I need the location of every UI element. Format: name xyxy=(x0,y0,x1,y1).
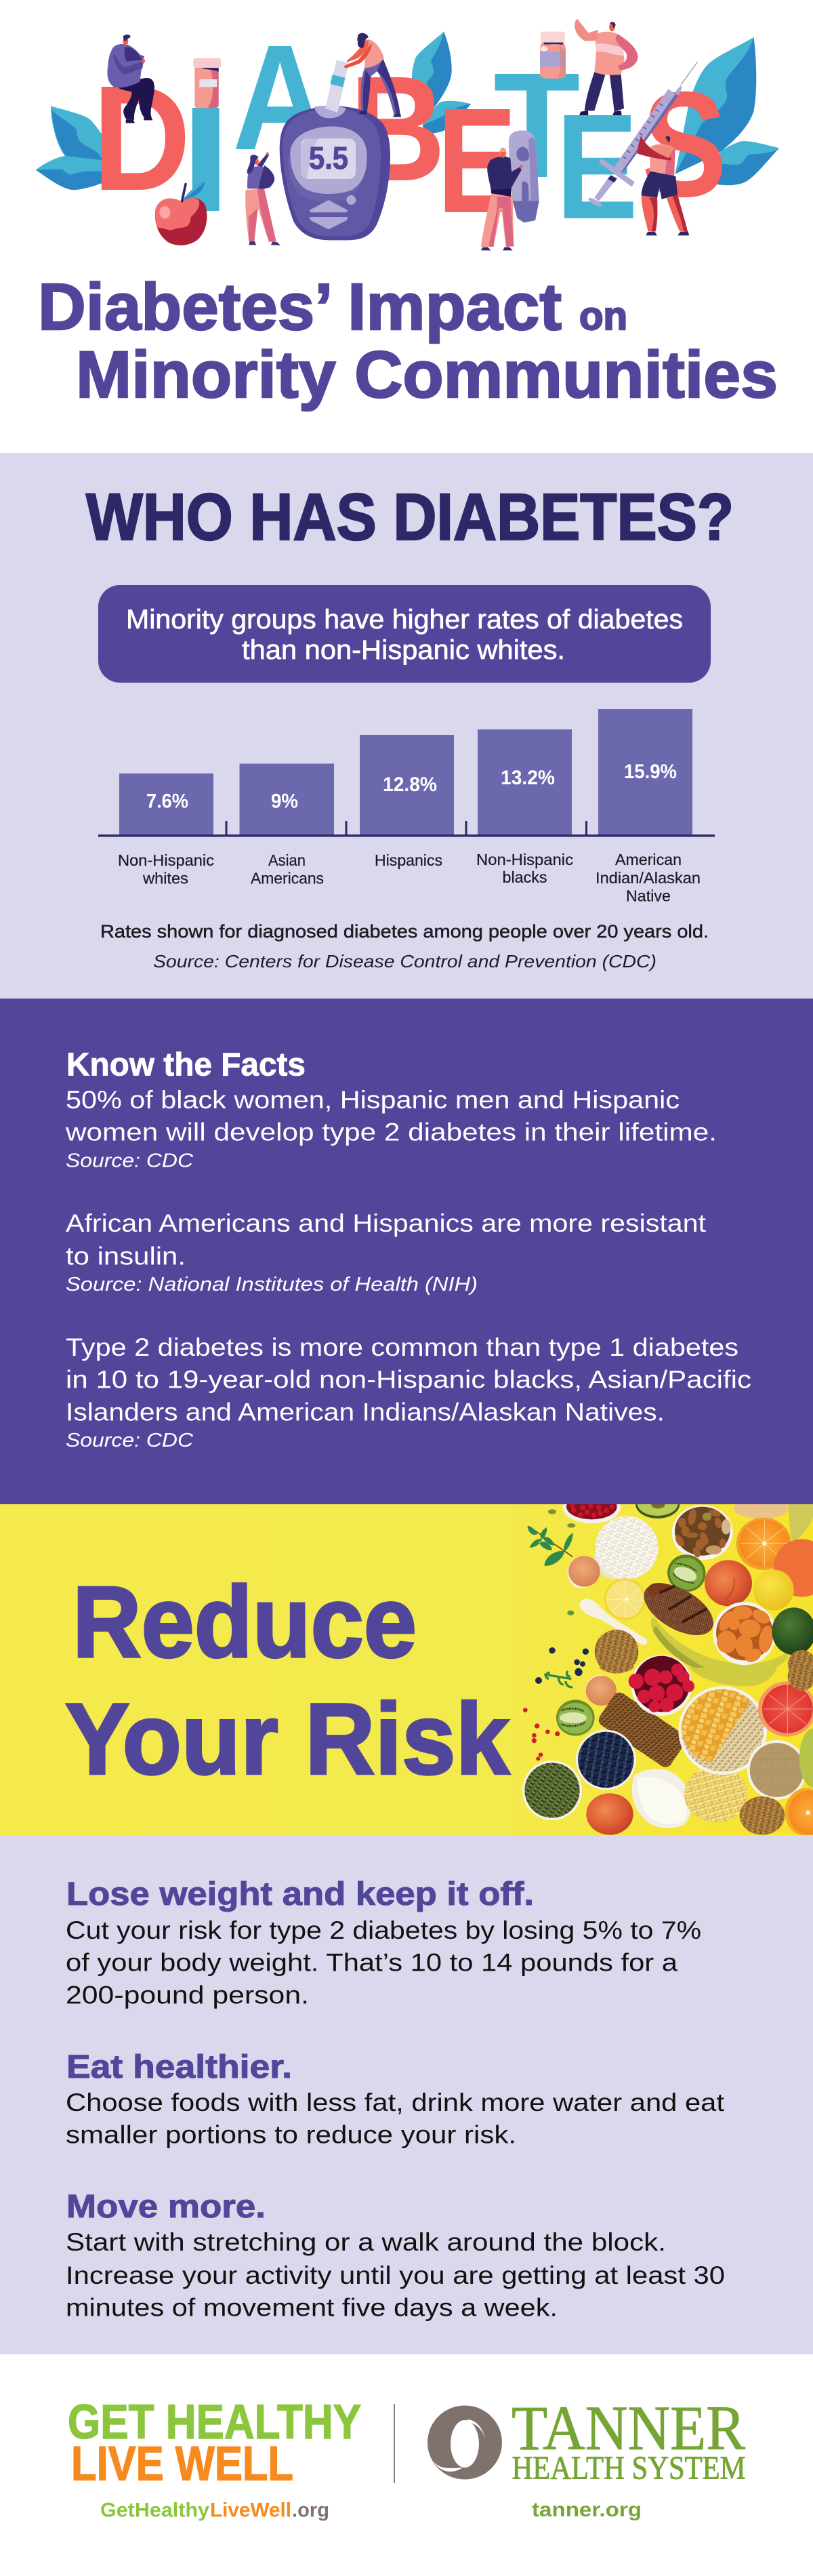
title: on xyxy=(579,294,627,338)
fact two: African Americans and Hispanics are more resistant xyxy=(66,1209,707,1237)
panel: who has diabetes xyxy=(0,453,813,999)
heading: know the facts: Know the Facts xyxy=(66,1047,306,1083)
tip: eat healthier: Choose foods with less fat, drink more water and eat xyxy=(66,2089,725,2116)
fact three: Islanders and American Indians/Alaskan Natives. xyxy=(66,1398,665,1426)
bar chart: diabetes rates: 13.2% xyxy=(501,767,555,789)
pen device with person xyxy=(481,130,539,250)
person waving on letter E xyxy=(575,19,638,115)
tip: move more xyxy=(66,2189,725,2321)
panel: risk reduction tips xyxy=(0,1835,813,2354)
letters DIABETES: B xyxy=(350,45,446,213)
fact two xyxy=(66,1209,707,1295)
bar chart: diabetes rates: 12.8% xyxy=(383,773,437,796)
bar chart: diabetes rates: 15.9% xyxy=(624,761,677,783)
url: tanner.org: tanner.org xyxy=(532,2499,642,2521)
meter reading: 5.5 xyxy=(309,140,348,176)
tip: move more: Start with stretching or a walk around the block. xyxy=(66,2228,666,2256)
bar chart: diabetes rates: whites xyxy=(142,869,188,887)
fact three: Type 2 diabetes is more common than type 1 diabetes xyxy=(66,1333,738,1361)
url: gethealthylivewell.org: .org xyxy=(292,2499,329,2522)
url: gethealthylivewell.org xyxy=(100,2499,329,2522)
heading: reduce your risk xyxy=(65,1565,510,1795)
logo: get healthy live well xyxy=(68,2396,361,2491)
person placing test strip xyxy=(343,33,401,117)
letters DIABETES: D xyxy=(92,54,191,222)
fact two: Source: National Institutes of Health (NIH) xyxy=(66,1274,478,1295)
tip: move more: Increase your activity until you are getting at least 30 xyxy=(66,2261,725,2289)
fact one xyxy=(65,1086,717,1171)
bar chart: diabetes rates xyxy=(98,709,715,904)
chart note: Rates shown for diagnosed diabetes among people over 20 years old. xyxy=(100,921,709,942)
logo: tanner health system: HEALTH SYSTEM xyxy=(512,2449,745,2487)
letters DIABETES xyxy=(92,14,727,250)
woman looking up xyxy=(245,153,280,245)
logo: tanner ring icon xyxy=(428,2405,502,2480)
bar chart: diabetes rates: Hispanics xyxy=(375,851,442,869)
lower food items xyxy=(522,1655,813,1836)
letters DIABETES: E xyxy=(437,77,517,244)
url: gethealthylivewell.org: LiveWell xyxy=(210,2499,291,2522)
bar chart: diabetes rates: Non-Hispanic xyxy=(476,851,573,868)
vial on letter T xyxy=(540,32,566,79)
pill bottle on letter I xyxy=(193,58,221,108)
bar chart: diabetes rates: American xyxy=(615,851,682,868)
bar chart: diabetes rates: Asian xyxy=(268,851,306,869)
fact three: in 10 to 19-year-old non-Hispanic blacks, Asian/Pacific xyxy=(66,1365,751,1394)
callout: minority groups xyxy=(98,585,711,683)
chart source: Source: Centers for Disease Control and Prevention (CDC) xyxy=(153,951,656,971)
logo: get healthy live well: LIVE WELL xyxy=(71,2438,293,2491)
tip: eat healthier: smaller portions to reduce your risk. xyxy=(66,2120,516,2149)
bar chart: diabetes rates: Indian/Alaskan xyxy=(596,869,701,887)
letters DIABETES: A xyxy=(232,14,327,182)
title: Minority Communities xyxy=(76,338,778,411)
hero illustration: diabetes lettering with people xyxy=(36,14,779,250)
apple xyxy=(155,181,207,245)
tip: lose weight: Cut your risk for type 2 diabetes by losing 5% to 7% xyxy=(66,1916,701,1944)
leaves behind letters xyxy=(36,32,779,190)
heading: who has diabetes: WHO HAS DIABETES? xyxy=(86,480,734,554)
syringe with person xyxy=(587,62,697,235)
logo: get healthy live well: GET HEALTHY xyxy=(68,2396,361,2449)
bar chart: diabetes rates: 7.6% xyxy=(146,790,188,812)
letters DIABETES: T xyxy=(493,41,580,209)
fact two: to insulin. xyxy=(66,1242,186,1270)
fact one: 50% of black women, Hispanic men and Hispanic xyxy=(66,1086,680,1114)
letters DIABETES: E xyxy=(556,83,638,250)
callout: minority groups: Minority groups have higher rates of diabetes xyxy=(126,605,683,635)
callout: minority groups: than non-Hispanic whites. xyxy=(242,635,565,665)
tip: move more: minutes of movement five days a week. xyxy=(66,2294,558,2321)
upper food items xyxy=(527,1504,813,1674)
tip: eat healthier xyxy=(66,2049,725,2149)
letters DIABETES: S xyxy=(642,60,727,228)
bar chart: diabetes rates: blacks xyxy=(503,868,547,886)
panel: reduce your risk banner xyxy=(0,1489,813,1836)
person sitting on letter D xyxy=(107,35,154,123)
letters DIABETES: I xyxy=(180,76,232,243)
fact three xyxy=(66,1333,751,1451)
tip: lose weight: 200-pound person. xyxy=(66,1981,309,2009)
heading: reduce your risk: Reduce xyxy=(72,1565,417,1678)
fact one: women will develop type 2 diabetes in their lifetime. xyxy=(65,1119,717,1146)
bar chart: diabetes rates: Non-Hispanic xyxy=(118,851,214,869)
url: gethealthylivewell.org: GetHealthy xyxy=(100,2499,209,2522)
bar chart: diabetes rates: Americans xyxy=(251,869,324,887)
panel: know the facts xyxy=(0,999,813,1504)
glucose meter xyxy=(280,60,390,240)
footer logos xyxy=(68,2394,745,2522)
tip: lose weight: Lose weight and keep it off. xyxy=(66,1876,534,1912)
tip: eat healthier: Eat healthier. xyxy=(66,2049,292,2085)
logo: tanner health system: TANNER xyxy=(512,2394,745,2463)
food photo collage xyxy=(522,1489,813,1836)
heading: reduce your risk: Your Risk xyxy=(65,1683,510,1795)
bar chart: diabetes rates: Native xyxy=(626,887,671,904)
fact one: Source: CDC xyxy=(66,1150,194,1171)
title: Diabetes’ Impact xyxy=(38,270,562,344)
fact three: Source: CDC xyxy=(66,1430,194,1451)
bar chart: diabetes rates: 9% xyxy=(271,790,298,812)
tip: move more: Move more. xyxy=(66,2189,266,2225)
title xyxy=(38,270,778,411)
tip: lose weight xyxy=(66,1876,701,2009)
tip: lose weight: of your body weight. That’s 10 to 14 pounds for a xyxy=(66,1948,678,1977)
